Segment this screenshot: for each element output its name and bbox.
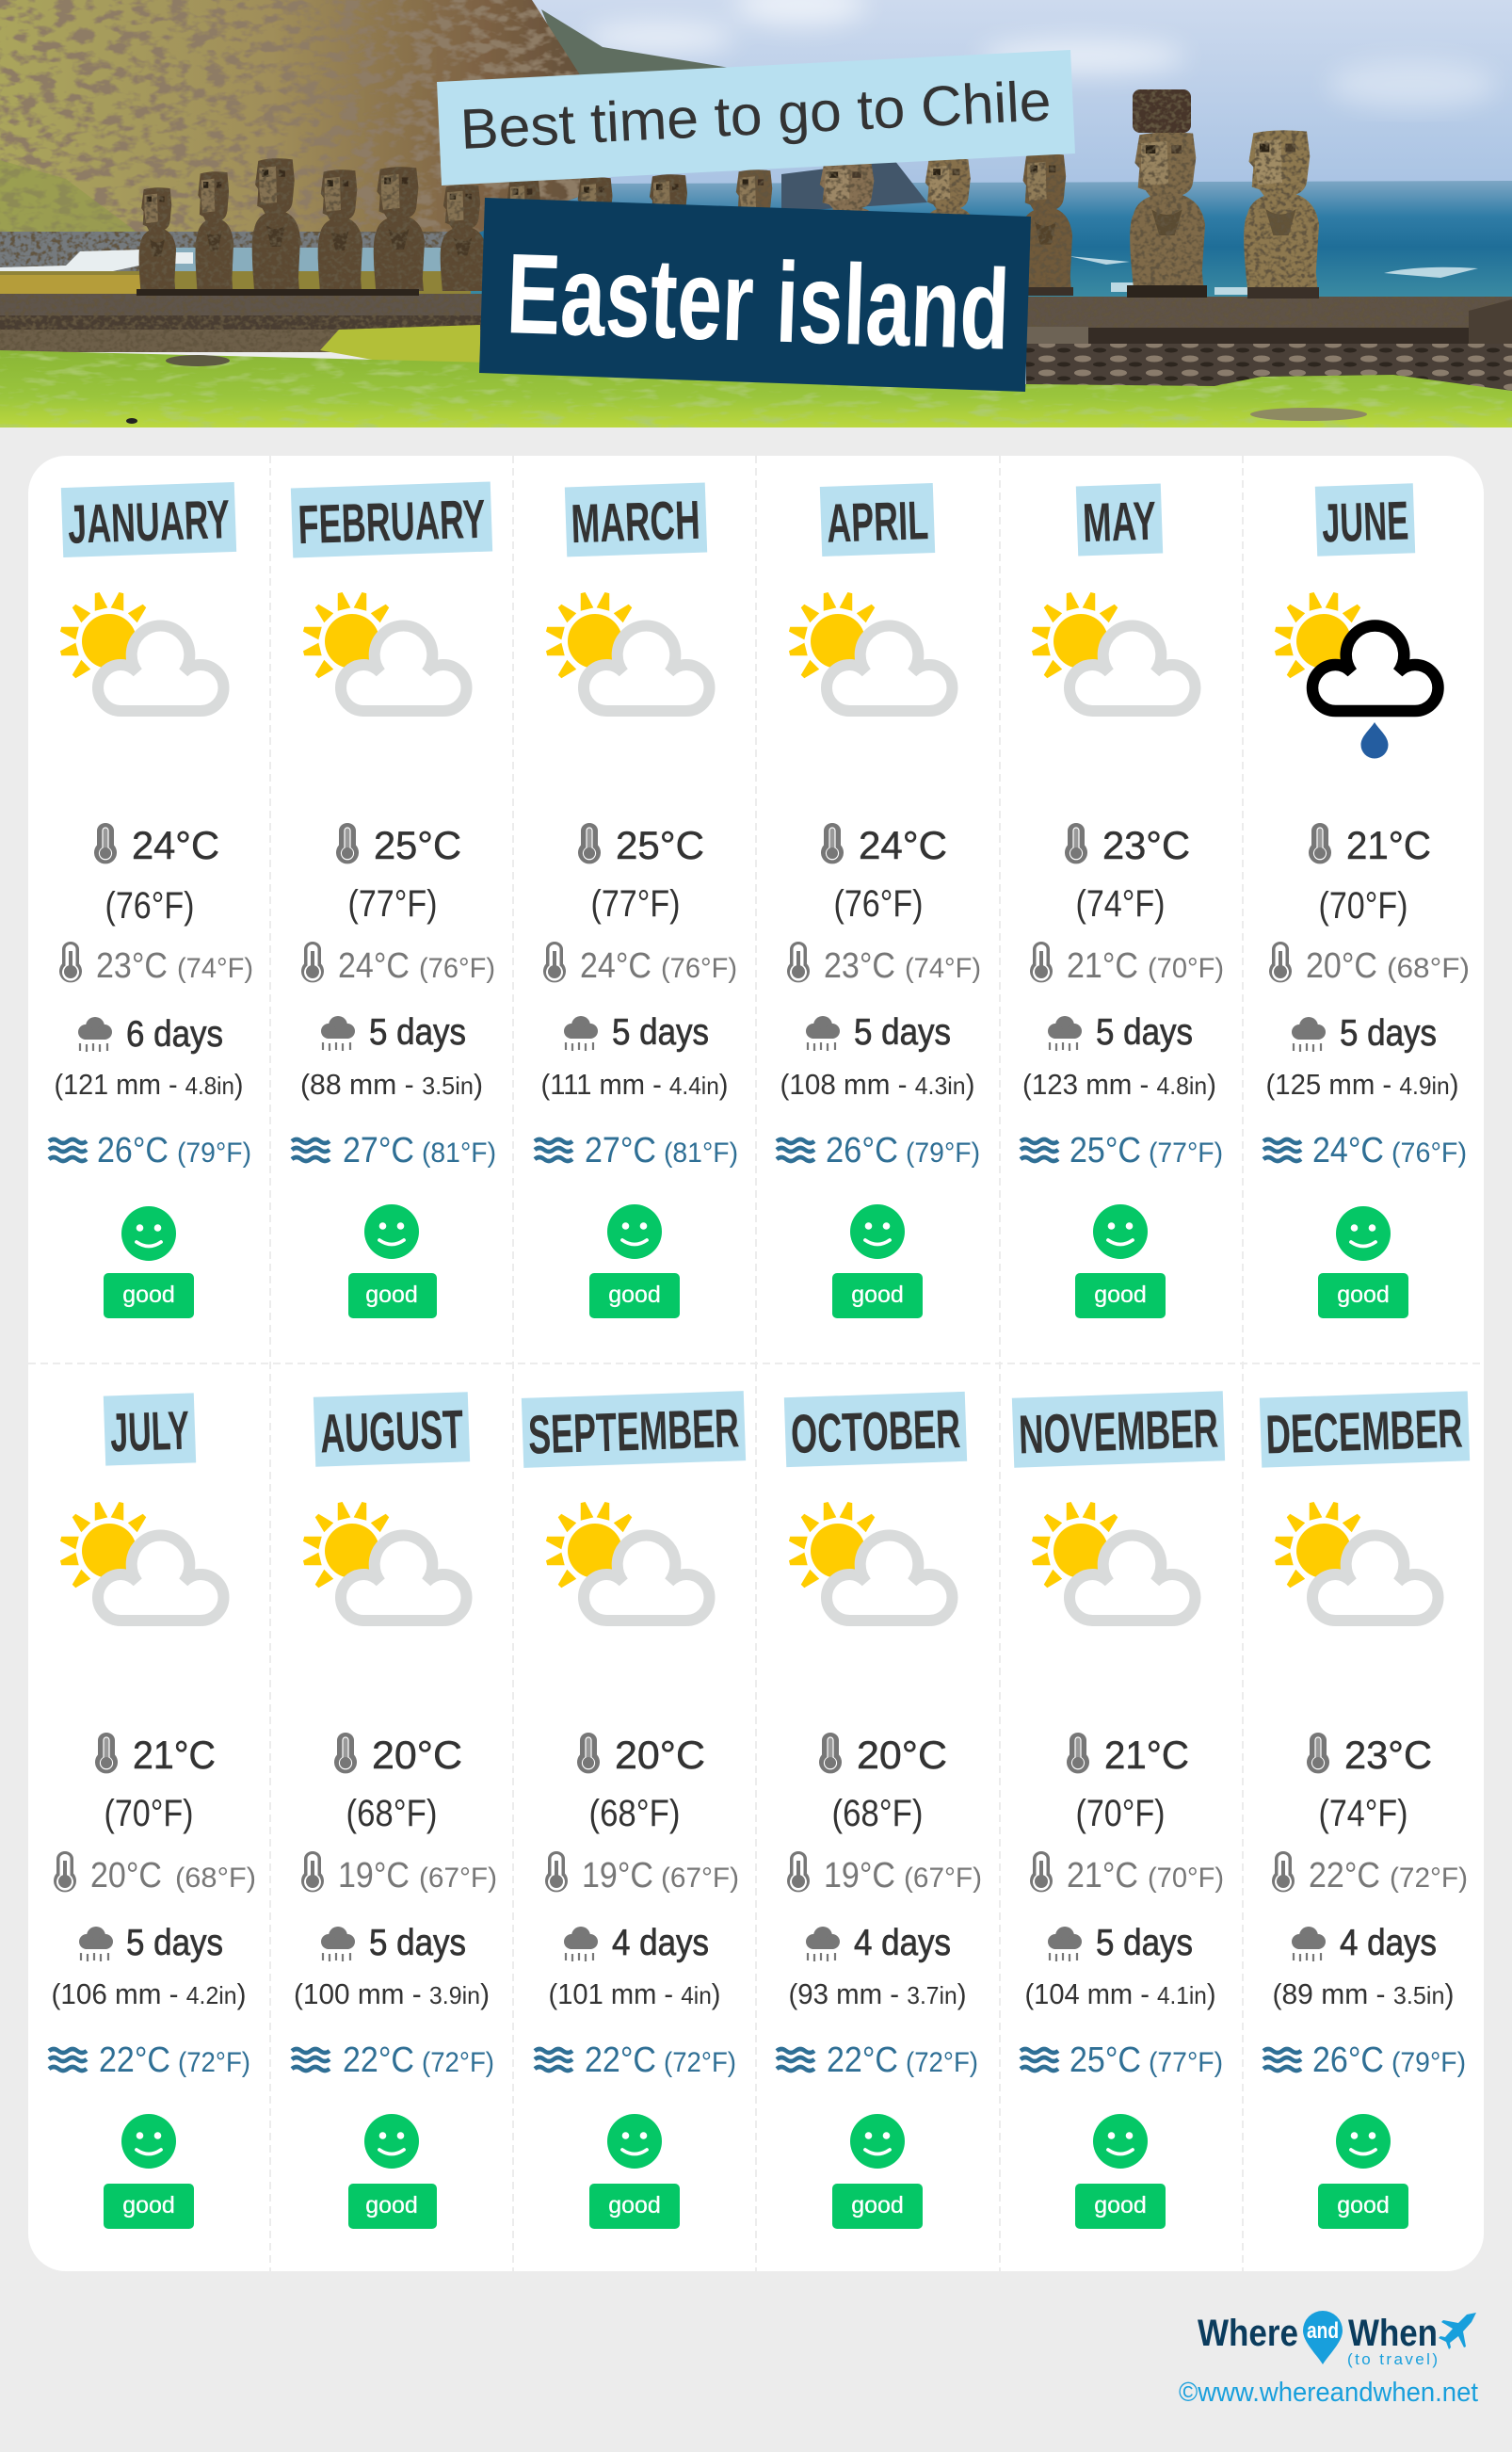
month: May [1021, 484, 1224, 1318]
month: September [522, 1391, 746, 2229]
sea temperature: (72°F) [422, 2047, 494, 2078]
rating: good: good [1337, 2192, 1390, 2218]
sea temperature [1263, 1131, 1467, 1170]
rainy days [79, 1923, 223, 1963]
rating: good [1075, 1204, 1166, 1318]
low temperature [59, 942, 253, 986]
rating: good: good [1094, 1282, 1147, 1308]
low temperature: (74°F) [177, 953, 253, 984]
sea temperature: 24°C [1312, 1131, 1384, 1170]
sea temperature: 22°C [343, 2041, 414, 2080]
rating: good: good [1337, 1282, 1390, 1308]
rainy days: 4 days [1340, 1923, 1437, 1963]
low temperature: 22°C [1309, 1856, 1380, 1895]
rainfall: (123 mm - 4.8in) [1022, 1068, 1216, 1101]
sea temperature: 22°C [585, 2041, 656, 2080]
low temperature: (70°F) [1148, 1863, 1224, 1894]
rainfall: (100 mm - 3.9in) [294, 1977, 490, 2010]
sea temperature [777, 2041, 978, 2080]
high temperature Fahrenheit: (68°F) [346, 1793, 437, 1834]
rainy days [321, 1923, 466, 1963]
low temperature [301, 942, 495, 986]
month: December [1260, 1391, 1470, 2229]
rainy days [1048, 1923, 1193, 1963]
sea temperature: 25°C [1070, 2041, 1141, 2080]
high temperature: 21°C [1346, 823, 1431, 867]
sea temperature: 22°C [99, 2041, 170, 2080]
low temperature: 24°C [338, 946, 410, 986]
high temperature Fahrenheit: (76°F) [834, 883, 923, 925]
low temperature: 23°C [824, 946, 895, 986]
low temperature: 19°C [338, 1856, 410, 1895]
heading: September: SEPTEMBER [527, 1397, 740, 1466]
low temperature: 21°C [1067, 1856, 1138, 1895]
low temperature [543, 942, 737, 986]
rainy days: 6 days [126, 1014, 223, 1055]
low temperature [545, 1851, 739, 1895]
heading: July: JULY [109, 1400, 190, 1463]
high temperature [95, 1733, 216, 1777]
title banner: Easter island [479, 198, 1031, 392]
icon: sun behind cloud [59, 1501, 223, 1621]
sea temperature: (76°F) [1391, 1137, 1467, 1169]
heading: November: NOVEMBER [1018, 1398, 1219, 1465]
heading: January: JANUARY [67, 489, 231, 556]
rainy days: 4 days [612, 1923, 709, 1963]
high temperature Fahrenheit: (77°F) [591, 883, 680, 925]
sea temperature [777, 1131, 980, 1170]
sea temperature: 26°C [1312, 2041, 1384, 2080]
rainy days [564, 1012, 709, 1053]
rating: good [104, 2114, 194, 2229]
high temperature: 24°C [859, 823, 947, 867]
high temperature: 25°C [616, 823, 704, 867]
rating: good [832, 1204, 923, 1318]
low temperature [787, 1851, 982, 1895]
heading: June: JUNE [1321, 490, 1409, 555]
rainy days [1292, 1923, 1437, 1963]
low temperature [1030, 942, 1224, 986]
logo: Where and When to travel: Where [1198, 2313, 1298, 2354]
low temperature [1269, 942, 1470, 986]
icon: map pin [1303, 2311, 1343, 2364]
sea temperature: 27°C [585, 1131, 656, 1170]
logo: Where and When to travel: (to travel) [1347, 2350, 1438, 2368]
sea temperature: (79°F) [177, 1137, 251, 1169]
rating: good: good [122, 1282, 175, 1308]
heading: November [1012, 1391, 1225, 1468]
icon: sun behind cloud [1031, 1501, 1196, 1621]
title banner: Easter island: Easter island [505, 229, 1011, 374]
sea temperature: (77°F) [1149, 1137, 1223, 1169]
sea temperature [292, 1131, 496, 1170]
heading: February: FEBRUARY [298, 489, 487, 556]
sea temperature: (81°F) [664, 1137, 738, 1169]
rating: good [1075, 2114, 1166, 2229]
icon: sun behind cloud [1274, 1501, 1439, 1621]
heading: January [61, 482, 236, 557]
high temperature: 24°C [132, 823, 219, 867]
heading: May: MAY [1082, 491, 1157, 554]
high temperature: 23°C [1344, 1733, 1432, 1777]
low temperature: (67°F) [904, 1863, 982, 1894]
rating: good: good [851, 2192, 904, 2218]
high temperature [1065, 823, 1190, 867]
rating: good [348, 2114, 437, 2229]
month: November [1012, 1391, 1225, 2229]
low temperature [1030, 1851, 1224, 1895]
icon: sun behind rain cloud [1274, 591, 1439, 759]
month: April [777, 483, 981, 1318]
high temperature Fahrenheit: (70°F) [1318, 885, 1408, 927]
rating: good: good [608, 1282, 661, 1308]
heading: October: OCTOBER [790, 1398, 961, 1465]
high temperature: 20°C [857, 1733, 947, 1777]
rainy days: 5 days [612, 1012, 709, 1053]
icon: sun behind cloud [545, 591, 710, 711]
rating: good [589, 2114, 680, 2229]
icon: sun behind cloud [1031, 591, 1196, 711]
rating: good: good [1094, 2192, 1147, 2218]
rainy days: 5 days [369, 1923, 466, 1963]
month: August [292, 1392, 497, 2229]
heading: July [104, 1393, 196, 1466]
high temperature Fahrenheit: (68°F) [832, 1793, 923, 1834]
logo: Where and When to travel: When [1348, 2313, 1438, 2354]
high temperature [94, 823, 219, 867]
rating: good [589, 1204, 680, 1318]
heading: March [565, 483, 707, 557]
high temperature: 25°C [374, 823, 461, 867]
heading: October [784, 1392, 967, 1467]
rating: good [104, 1206, 194, 1318]
title banner: Best time to go to Chile: Best time to go to Chile [458, 69, 1053, 161]
website credit: ©www.whereandwhen.net [1179, 2378, 1478, 2408]
low temperature: (76°F) [661, 953, 737, 984]
rating: good: good [122, 2192, 175, 2218]
sea temperature: 26°C [826, 1131, 898, 1170]
title banner: Best time to go to Chile [437, 50, 1075, 186]
high temperature [336, 823, 461, 867]
rainfall: (125 mm - 4.9in) [1265, 1068, 1459, 1101]
sea temperature: 25°C [1070, 1131, 1141, 1170]
low temperature [54, 1851, 256, 1895]
month: March [535, 483, 738, 1318]
sea temperature: (79°F) [1391, 2047, 1466, 2078]
rainfall: (89 mm - 3.5in) [1273, 1977, 1454, 2010]
rating: good [832, 2114, 923, 2229]
month: October [777, 1392, 982, 2229]
heading: March: MARCH [571, 490, 701, 555]
logo: Where and When to travel: and [1307, 2318, 1339, 2344]
high temperature [334, 1733, 462, 1777]
high temperature [1067, 1733, 1189, 1777]
high temperature: 20°C [372, 1733, 462, 1777]
card background [28, 456, 1484, 2271]
low temperature [1272, 1851, 1468, 1895]
heading: August: AUGUST [319, 1398, 464, 1465]
sea temperature: (72°F) [906, 2047, 978, 2078]
sea temperature: 26°C [97, 1131, 169, 1170]
rainy days: 5 days [126, 1923, 223, 1963]
low temperature: 19°C [824, 1856, 895, 1895]
low temperature: (68°F) [175, 1863, 256, 1894]
high temperature: 23°C [1102, 823, 1190, 867]
high temperature [1309, 823, 1431, 867]
sea temperature: 27°C [343, 1131, 414, 1170]
icon: sun behind cloud [302, 591, 467, 711]
rainy days: 4 days [854, 1923, 951, 1963]
sea temperature [535, 2041, 736, 2080]
rating: good: good [608, 2192, 661, 2218]
sea temperature: (72°F) [664, 2047, 736, 2078]
rating: good [348, 1204, 437, 1318]
high temperature: 21°C [1104, 1733, 1189, 1777]
rainy days [78, 1014, 223, 1055]
low temperature: (72°F) [1390, 1863, 1468, 1894]
rainy days: 5 days [854, 1012, 951, 1053]
rainy days: 5 days [1096, 1923, 1193, 1963]
heading: June [1315, 483, 1415, 557]
sea temperature: (72°F) [178, 2047, 250, 2078]
high temperature [1307, 1733, 1432, 1777]
heading: April [820, 483, 935, 557]
low temperature: (67°F) [661, 1863, 739, 1894]
high temperature Fahrenheit: (70°F) [1075, 1793, 1166, 1834]
sea temperature [49, 2041, 250, 2080]
rainfall: (104 mm - 4.1in) [1024, 1977, 1216, 2010]
rainfall: (108 mm - 4.3in) [780, 1068, 975, 1101]
rainfall: (93 mm - 3.7in) [789, 1977, 966, 2010]
low temperature: (76°F) [419, 953, 495, 984]
rainfall: (101 mm - 4in) [548, 1977, 721, 2010]
sea temperature: (77°F) [1149, 2047, 1223, 2078]
icon: sun behind cloud [788, 1501, 953, 1621]
rainy days: 5 days [1096, 1012, 1193, 1053]
month: February [291, 482, 496, 1318]
sea temperature [49, 1131, 251, 1170]
sea temperature [1021, 1131, 1223, 1170]
month: July [49, 1393, 256, 2229]
sea temperature [535, 1131, 738, 1170]
rainfall: (88 mm - 3.5in) [300, 1068, 483, 1101]
low temperature: 23°C [96, 946, 168, 986]
high temperature: 20°C [615, 1733, 705, 1777]
sea temperature [1021, 2041, 1223, 2080]
heading: May [1076, 484, 1163, 556]
high temperature Fahrenheit: (74°F) [1318, 1793, 1408, 1834]
high temperature: 21°C [133, 1733, 216, 1777]
low temperature: 20°C [1306, 946, 1377, 986]
rainfall: (121 mm - 4.8in) [55, 1068, 243, 1101]
icon: sun behind cloud [302, 1501, 467, 1621]
low temperature [301, 1851, 497, 1895]
panel: monthly climate calendar [28, 456, 1484, 2271]
high temperature Fahrenheit: (68°F) [589, 1793, 680, 1834]
hero photo: moai statues on Easter island [0, 0, 1512, 427]
high temperature Fahrenheit: (74°F) [1075, 883, 1166, 925]
month: January [49, 482, 253, 1318]
low temperature: 19°C [582, 1856, 653, 1895]
rainfall: (106 mm - 4.2in) [51, 1977, 247, 2010]
rainy days [806, 1923, 951, 1963]
rainy days [321, 1012, 466, 1053]
high temperature [577, 1733, 705, 1777]
low temperature: (74°F) [905, 953, 981, 984]
rating: good: good [851, 1282, 904, 1308]
rainy days: 5 days [369, 1012, 466, 1053]
month: June [1263, 483, 1470, 1318]
rainy days: 5 days [1340, 1013, 1437, 1054]
heading: September [522, 1391, 746, 1468]
rating: good [1318, 1206, 1408, 1318]
sea temperature [292, 2041, 494, 2080]
low temperature: (70°F) [1148, 953, 1224, 984]
logo: Where and When to travel [1198, 2311, 1476, 2368]
rating: good [1318, 2114, 1408, 2229]
icon: sun behind cloud [788, 591, 953, 711]
rainy days [806, 1012, 951, 1053]
high temperature Fahrenheit: (70°F) [104, 1793, 194, 1834]
low temperature: 20°C [90, 1856, 162, 1895]
sea temperature: 22°C [827, 2041, 898, 2080]
rating: good: good [365, 1282, 418, 1308]
icon: sun behind cloud [545, 1501, 710, 1621]
high temperature Fahrenheit: (77°F) [348, 883, 437, 925]
high temperature Fahrenheit: (76°F) [105, 885, 194, 927]
rainy days [1292, 1013, 1437, 1054]
high temperature [819, 1733, 947, 1777]
icon: sun behind cloud [59, 591, 223, 711]
low temperature: 21°C [1067, 946, 1138, 986]
rating: good: good [365, 2192, 418, 2218]
rainy days [564, 1923, 709, 1963]
sea temperature: (81°F) [422, 1137, 496, 1169]
heading: April: APRIL [826, 490, 929, 555]
low temperature [787, 942, 981, 986]
heading: February [291, 482, 492, 557]
rainy days [1048, 1012, 1193, 1053]
low temperature: (68°F) [1387, 953, 1470, 984]
rainfall: (111 mm - 4.4in) [540, 1068, 729, 1101]
low temperature: (67°F) [419, 1863, 497, 1894]
sea temperature: (79°F) [906, 1137, 980, 1169]
heading: August [314, 1392, 470, 1467]
icon: airplane [1439, 2313, 1476, 2349]
sea temperature [1263, 2041, 1466, 2080]
low temperature: 24°C [580, 946, 651, 986]
